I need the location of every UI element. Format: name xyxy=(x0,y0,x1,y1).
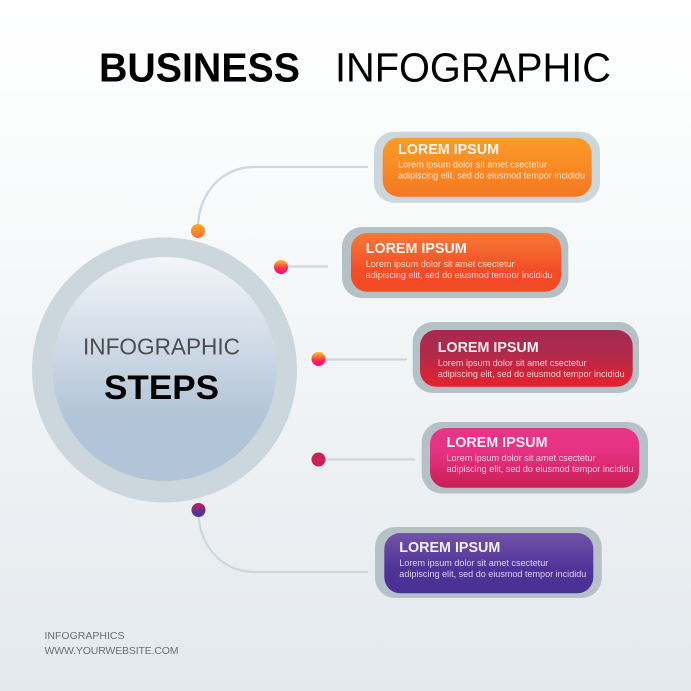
dot: step 4 xyxy=(312,452,326,466)
connector: step 3 xyxy=(322,358,407,361)
step 3 text: adipiscing elit, sed do eiusmod tempor incididu xyxy=(438,369,625,380)
step 1 text: Lorem ipsum dolor sit amet csectetur xyxy=(398,160,548,170)
panel: step 2 xyxy=(342,227,568,298)
connector: step 2 xyxy=(285,265,328,268)
step 3 text: Lorem ipsum dolor sit amet csectetur xyxy=(438,358,587,369)
step 2 text: Lorem ipsum dolor sit amet csectetur xyxy=(366,259,515,270)
title: BUSINESS xyxy=(99,44,300,90)
step 1 text xyxy=(398,141,585,182)
step 2 text xyxy=(366,240,553,281)
circle label: STEPS xyxy=(104,369,219,407)
dot: step 3 xyxy=(312,352,326,366)
step 4 text xyxy=(446,434,634,475)
central circle xyxy=(32,238,297,502)
footer: WWW.YOURWEBSITE.COM xyxy=(44,645,178,657)
panel: step 5 xyxy=(375,527,602,598)
step 2 text: adipiscing elit, sed do eiusmod tempor incididu xyxy=(366,270,553,281)
connector: step 1 xyxy=(198,167,368,226)
title xyxy=(99,44,611,90)
title: INFOGRAPHIC xyxy=(335,44,611,90)
step 1 text: adipiscing elit, sed do eiusmod tempor incididu xyxy=(398,170,585,182)
step 4 text: adipiscing elit, sed do eiusmod tempor incididu xyxy=(446,464,634,475)
dot: step 5 xyxy=(192,503,206,517)
step 2 text: LOREM IPSUM xyxy=(366,240,467,257)
dot: step 1 xyxy=(191,224,205,238)
step 5 text: Lorem ipsum dolor sit amet csectetur xyxy=(399,558,549,569)
footer: INFOGRAPHICS xyxy=(44,630,124,642)
dot: step 2 xyxy=(274,260,288,274)
panel: step 3 xyxy=(413,322,639,393)
step 3 text: LOREM IPSUM xyxy=(438,339,539,356)
step 4 text: Lorem ipsum dolor sit amet csectetur xyxy=(446,453,596,464)
step 5 text: adipiscing elit, sed do eiusmod tempor incididu xyxy=(399,569,586,580)
footer xyxy=(44,630,178,657)
panel: step 1 xyxy=(374,132,600,203)
step 3 text xyxy=(438,339,625,380)
circle label: INFOGRAPHIC xyxy=(83,334,240,360)
step 1 text: LOREM IPSUM xyxy=(398,141,499,158)
connector: step 4 xyxy=(322,458,415,461)
step 5 text xyxy=(399,539,586,580)
step 4 text: LOREM IPSUM xyxy=(446,434,548,451)
step 5 text: LOREM IPSUM xyxy=(399,539,500,556)
circle label xyxy=(83,334,240,407)
panel: step 4 xyxy=(422,422,648,494)
connector: step 5 xyxy=(198,514,368,572)
